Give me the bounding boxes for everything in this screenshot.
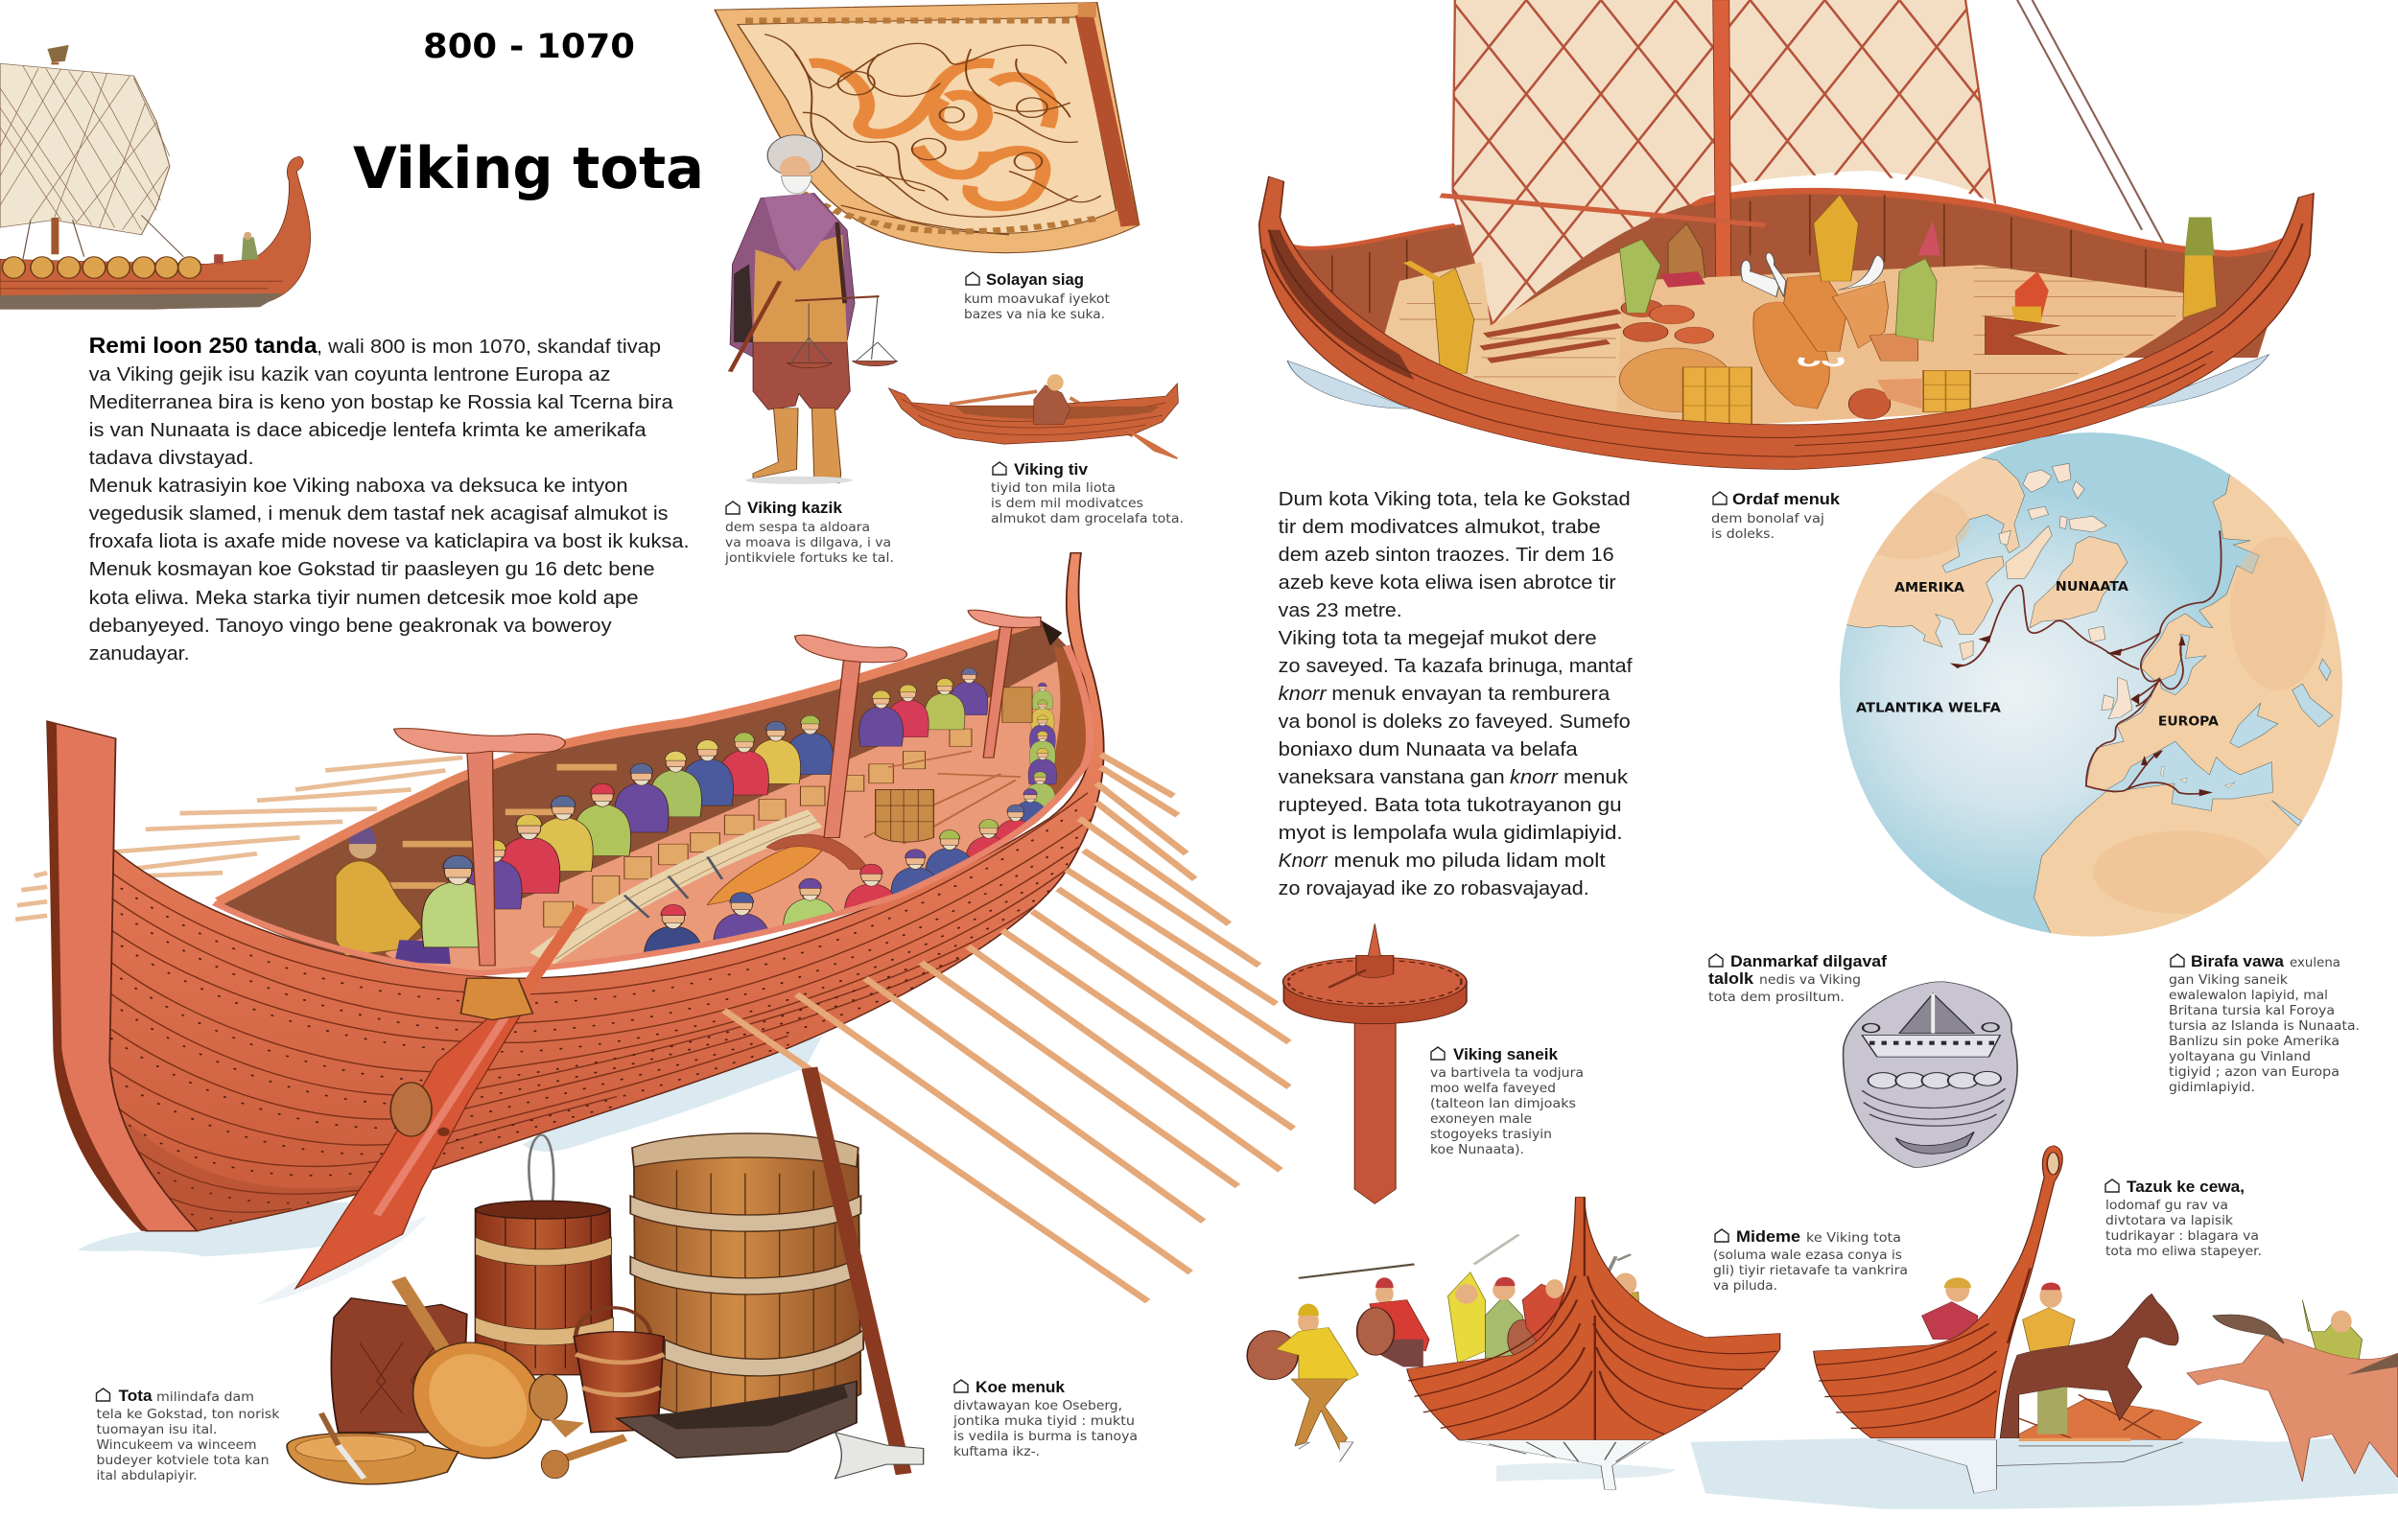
trough [617,1381,857,1458]
text block: introduction: Mediterranea bira is keno yon bostap ke Rossia kal Tcerna bira [89,391,673,413]
text block: introduction: Menuk kosmayan koe Gokstad tir paasleyen gu 16 detc bene [89,558,655,580]
caption: Solayan siag [964,271,1110,322]
caption: Birafa vawa: yoltayana gu Vinland [2169,1049,2311,1064]
caption: Viking saneik: Viking saneik [1453,1046,1559,1063]
chestnut horse and handler [2187,1300,2398,1482]
land: Greenland [2030,536,2128,628]
small bucket [576,1308,651,1337]
text block: introduction [89,333,690,665]
caption: Birafa vawa [2169,953,2360,1095]
caption: Viking kazik [724,500,894,566]
caption: Tota: milindafa dam [156,1389,254,1405]
small mallet [556,1437,625,1461]
caption: Ordaf menuk: dem bonolaf vaj [1711,511,1824,526]
text block: cargo ships: azeb keve kota eliwa isen abrotce tir [1279,572,1616,594]
illustration: unloading a horse from longship [1814,1146,2398,1493]
text block: cargo ships: Viking tota ta megejaf mukot dere [1279,627,1597,649]
map labels: NUNAATA [2056,579,2128,595]
caption: Mideme: ke Viking tota [1806,1230,1901,1246]
bowl and knife [287,1434,458,1484]
illustration: small sailing longship [0,45,311,309]
hull planks [107,793,1093,1231]
warrior with shield in front [1247,1304,1358,1461]
text block: cargo ships: knorr [1279,683,1328,705]
text block: introduction: vegedusik slamed, i menuk dem tastaf nek acagisaf almukot is [89,502,669,525]
text block: cargo ships: Knorr [1279,850,1328,872]
text block: cargo ships: va bonol is doleks zo faveyed. Sumefo [1279,711,1631,733]
caption: Birafa vawa: Birafa vawa [2191,953,2285,970]
text block: introduction: Menuk katrasiyin koe Viking naboxa va deksuca ke intyon [89,475,628,497]
text block: cargo ships: menuk envayan ta remburera [1331,683,1610,705]
caption: Ordaf menuk [1711,491,1841,542]
map labels: EUROPA [2158,714,2219,730]
caption: Tota: tuomayan isu ital. [96,1422,217,1437]
land: North America [1846,457,2025,648]
cattle and birds [1741,253,1922,408]
caption: Tota: Wincukeem va winceem [96,1437,257,1453]
wall benches [368,767,617,886]
text block: introduction: tadava divstayad. [89,447,254,469]
caption: Tazuk ke cewa: lodomaf gu rav va [2105,1198,2228,1213]
route arrowheads [1950,635,2213,796]
caption: Viking saneik: moo welfa faveyed [1430,1081,1556,1096]
text block: introduction: va Viking gejik isu kazik van coyunta lentrone Europa az [89,363,611,385]
text block: introduction: kota eliwa. Meka starka tiyir numen detcesik moe kold ape [89,587,639,609]
caption: Ordaf menuk: is doleks. [1711,526,1775,542]
near hull [1259,176,2314,470]
caption: Viking kazik: Viking kazik [747,500,843,517]
title: date range: 800 - 1070 [423,28,635,66]
route lines [1960,530,2222,794]
illustration: cargo knorr ship with sail [1258,0,2315,470]
text block: cargo ships: knorr [1510,766,1559,788]
caption: Birafa vawa: gan Viking saneik [2169,972,2288,988]
caption: Viking saneik: koe Nunaata). [1430,1142,1524,1157]
caption: Danish coin: nedis va Viking [1759,972,1861,988]
illustration: rowing boat [888,374,1178,458]
caption: Viking tiv: almukot dam grocelafa tota. [991,511,1184,526]
caption: Mideme [1713,1228,1908,1294]
text block: cargo ships: zo saveyed. Ta kazafa brinuga, mantaf [1279,655,1633,677]
caption: Birafa vawa: exulena [2290,955,2340,970]
helmsman [336,861,421,956]
text block: cargo ships: dem azeb sinton traozes. Tir dem 16 [1279,544,1614,566]
steering oar [295,907,582,1289]
land: Iceland and British Isles [2088,626,2105,642]
ladle [398,1279,445,1352]
hull [0,156,311,309]
rowers near row [644,683,1057,980]
near gunwale [214,645,1090,973]
text block: introduction: is van Nunaata is dace abicedje lentefa krimta ke amerikafa [89,419,647,441]
caption: Mideme: va piluda. [1713,1278,1777,1294]
rowers far row [422,668,988,947]
caption: Ordaf menuk: Ordaf menuk [1732,491,1841,508]
axe [810,1068,904,1474]
caption: Koe menuk: is vedila is burma is tanoya [953,1429,1138,1444]
interior [214,620,1090,973]
text block: introduction: zanudayar. [89,642,190,665]
text block: cargo ships: vaneksara vanstana gan [1279,766,1505,788]
map: Viking voyages [1822,429,2370,940]
caption: Tazuk ke cewa: divtotara va lapisik [2105,1213,2233,1228]
caption: Birafa vawa: tigiyid ; azon van Europa [2169,1064,2339,1080]
caption: Tota: tela ke Gokstad, ton norisk [96,1407,280,1422]
illustration: Viking saneik bearing dial [1283,923,1467,1203]
illustration: water under landing boats [1496,1435,2398,1509]
caption: Viking tiv: is dem mil modivatces [991,496,1143,511]
text block: cargo ships: zo rovajayad ike zo robasvajayad. [1279,877,1589,899]
water barrel [876,789,933,842]
caption: Koe menuk: kuftama ikz-. [953,1444,1040,1459]
stem post [47,721,197,1231]
title: Viking tota: Viking tota [353,135,704,202]
illustration: silver coin with ship [1844,982,2017,1168]
crew and cargo [336,668,1057,980]
sea [1840,432,2342,937]
deck floor [1377,249,1631,422]
left pail [331,1298,467,1433]
caption: Birafa vawa: Banlizu sin poke Amerika [2169,1034,2339,1049]
map labels: AMERIKA [1894,580,1965,595]
text block: cargo ships: menuk mo piluda lidam molt [1334,850,1606,872]
water [77,1202,411,1256]
scales [795,296,880,301]
caption: Mideme: gli) tiyir rietavafe ta vankrira [1713,1263,1908,1278]
caption: Danish coin: Danmarkaf dilgavaf [1730,953,1888,970]
caption: Koe menuk: jontika muka tiyid : muktu [952,1413,1135,1429]
text block: introduction: , wali 800 is mon 1070, skandaf tivap [317,336,661,358]
caption: Viking tiv [991,461,1184,526]
warriors behind hull [1299,1235,1639,1367]
far side of hull [1291,191,2296,358]
caption: Viking saneik: (talteon lan dimjoaks [1430,1096,1576,1111]
caption: Solayan siag: Solayan siag [986,271,1084,289]
text block: cargo ships: vas 23 metre. [1279,599,1402,621]
trousers [753,342,850,409]
tunic [753,235,847,345]
text block: cargo ships: myot is lempolafa wula gidimlapiyid. [1279,822,1623,844]
caption: Viking saneik: exoneyen male [1430,1111,1532,1127]
text block: cargo ships: tir dem modivatces almukot, trabe [1279,516,1601,538]
text block: cargo ships: Dum kota Viking tota, tela ke Gokstad [1279,488,1631,510]
head [767,135,823,176]
caption: Birafa vawa: tursia az Islanda is Nunaata. [2169,1018,2360,1034]
caption: Viking tiv: Viking tiv [1014,461,1089,478]
far gunwale [219,620,1041,901]
chests [544,729,972,927]
caption: Danish coin [1708,953,1888,1005]
boat inside [2011,1399,2201,1440]
caption: Tazuk ke cewa: tota mo eliwa stapeyer. [2105,1244,2262,1259]
sail [0,63,170,235]
crew [1407,195,2217,374]
caption: Viking saneik: va bartivela ta vodjura [1430,1065,1584,1081]
text block: cargo ships [1279,488,1633,899]
caption: Solayan siag: bazes va nia ke suka. [964,307,1105,322]
caption: Viking saneik [1430,1046,1584,1157]
seas: Baltic, Mediterranean, Black, Caspian, Red [2106,634,2333,826]
longship bow hull [1407,1197,1780,1440]
water seen through hull [1287,361,1411,408]
illustration: raiders beside a beached longship [1247,1197,1780,1489]
sail [1451,0,1996,329]
caption: Tazuk ke cewa: Tazuk ke cewa, [2127,1178,2245,1196]
illustration: Viking merchant with scales [730,135,898,484]
caption: Viking tiv: tiyid ton mila liota [991,480,1116,496]
text block: introduction: froxafa liota is axafe mide novese va katiclapira va bost ik kuksa. [89,530,690,552]
map labels [1856,579,2219,730]
caption: Viking saneik: stogoyeks trasiyin [1430,1127,1552,1142]
shields [2,257,201,278]
mast [1713,0,1731,361]
hull with tall prow [1814,1146,2062,1438]
caption: Viking kazik: dem sespa ta aldoara [725,520,870,535]
sword [730,281,780,372]
sail net [1451,0,1997,325]
rolled sail bundle [541,818,815,959]
caption: Tota: budeyer kotviele tota kan [96,1453,269,1468]
caption: Koe menuk: Koe menuk [976,1379,1066,1396]
caption: Viking kazik: va moava is dilgava, i va [725,535,891,550]
boots [753,408,798,478]
caption: Birafa vawa: Britana tursia kal Foroya [2169,1003,2335,1018]
caption: Mideme: Mideme [1736,1228,1800,1246]
land: Arctic islands [1999,463,2106,545]
text block: cargo ships: menuk [1563,766,1629,788]
yard [1441,196,1765,225]
caption: Koe menuk: divtawayan koe Oseberg, [953,1398,1122,1413]
caption: Koe menuk [952,1379,1138,1459]
near-side oars [724,755,1293,1301]
cloak [730,193,855,357]
caption: Viking kazik: jontikviele fortuks ke tal. [724,550,894,566]
illustration: Gokstad longship with crew [15,553,1293,1304]
map labels: ATLANTIKA WELFA [1856,701,2002,716]
caption: Solayan siag: kum moavukaf iyekot [964,292,1110,307]
medium bucket [529,1135,553,1203]
text block: introduction: Remi loon 250 tanda [89,333,317,358]
caption: Birafa vawa: gidimlapiyid. [2169,1080,2255,1095]
caption: Danish coin: talolk [1708,970,1754,988]
text block: cargo ships: rupteyed. Bata tota tukotrayanon gu [1279,794,1622,816]
cargo [1619,299,1970,425]
illustration: carved ornamental panel [715,3,1140,253]
caption: Tazuk ke cewa: tudrikayar : blagara va [2105,1228,2259,1244]
caption: Tota: Tota [119,1388,153,1405]
text block: cargo ships: boniaxo dum Nunaata va belafa [1279,738,1578,760]
hull [107,553,1104,1231]
planks on floor [864,751,1021,844]
brown horse [2000,1294,2178,1438]
rigging [2017,0,2164,245]
text block: introduction: debanyeyed. Tanoyo vingo bene geakronak va boweroy [89,615,612,637]
mast crutches [394,610,1041,966]
caption: Danish coin: tota dem prosiltum. [1708,990,1845,1005]
caption: Tota [96,1388,280,1483]
caption: Mideme: (soluma wale ezasa conya is [1713,1248,1902,1263]
figures behind [1922,1277,2075,1351]
caption: Birafa vawa: ewalewalon lapiyid, mal [2169,988,2328,1003]
far-side oars [15,758,462,920]
caption: Tazuk ke cewa [2105,1178,2262,1259]
large barrel [634,1137,860,1423]
illustration: barrels, buckets and tools [287,1068,924,1484]
caption: Tota: ital abdulapiyir. [96,1468,198,1483]
mast fish [706,847,823,905]
land: Eurasia and Africa [2034,474,2342,936]
